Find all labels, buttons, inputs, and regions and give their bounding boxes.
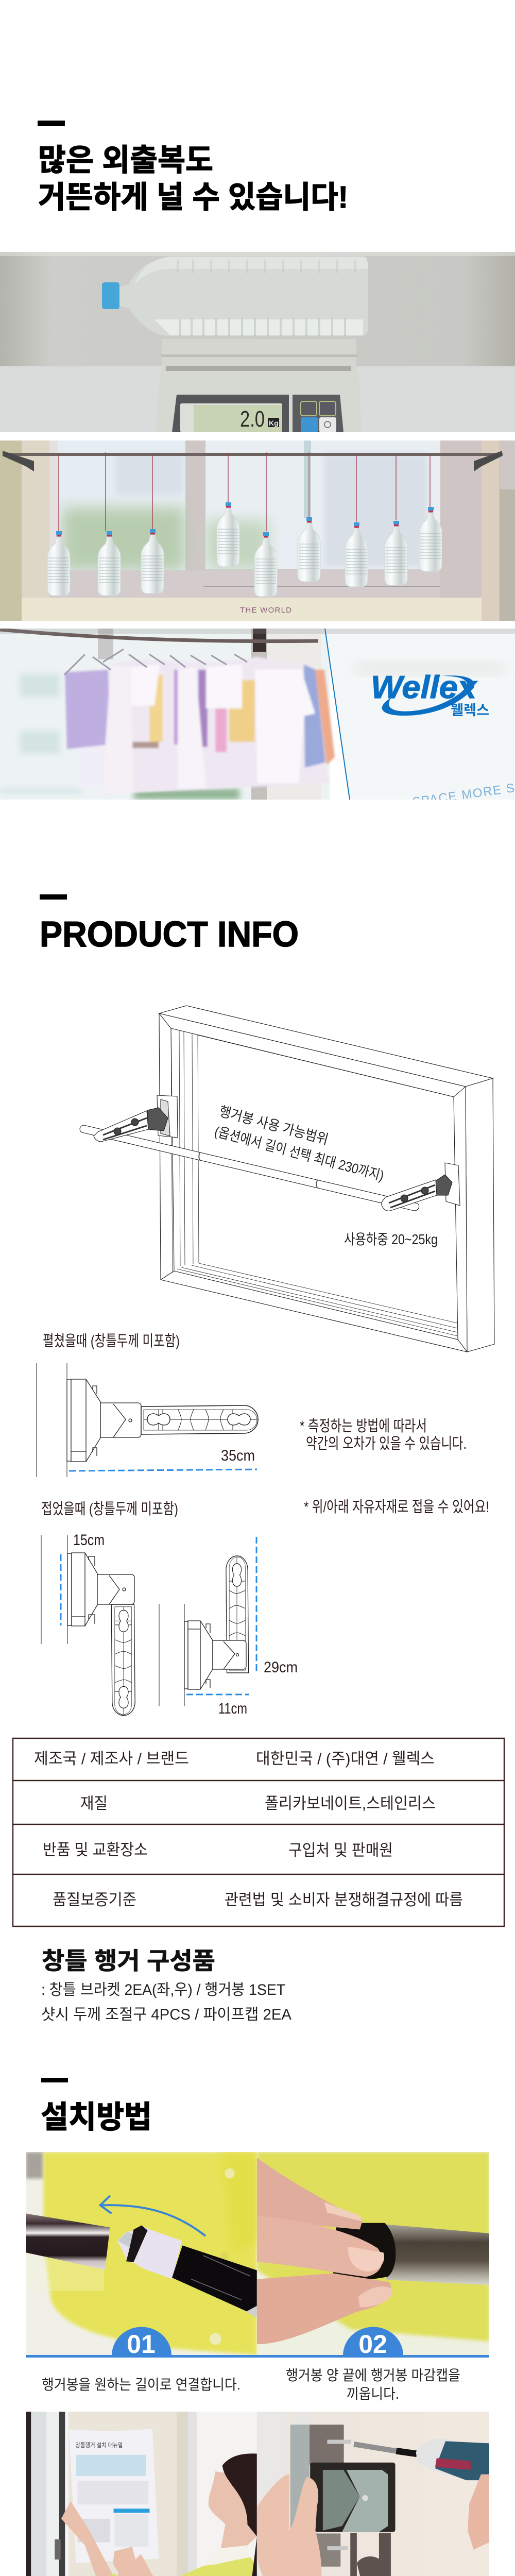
row: returns: 반품 및 교환장소 [43,1841,148,1859]
note line 2: 약간의 오차가 있을 수 있습니다. [306,1435,467,1452]
heading: unfolded size: 펼쳤을때 (창틀두께 미포함) [43,1333,180,1350]
wall lines [37,1363,67,1477]
hanger rod [80,1125,419,1211]
width label: 35cm [221,1447,255,1464]
rod end cap [333,2223,396,2282]
bracket body [67,1379,141,1462]
hanging rod [3,453,503,456]
hangers [64,649,247,675]
step caption 02: 행거봉 양 끝에 행거봉 마감캡을 [286,2367,460,2383]
diagram: unfolded bracket [37,1363,258,1477]
row: origin and brand: 대한민국 / (주)대연 / 웰렉스 [256,1750,435,1768]
height dimension line [255,1537,258,1672]
height label: 29cm [264,1659,298,1676]
heading: folded size: 접었을때 (창틀두께 미포함) [41,1501,178,1518]
row: material [80,1794,436,1812]
heading line 2: 거뜬하게 널 수 있습니다! [38,180,348,214]
bracket plate [290,2425,417,2576]
row: warranty [53,1891,463,1909]
sill and walls [70,570,254,579]
woman: arm and cardigan [61,2501,257,2576]
drill [416,2438,489,2536]
paper title: 창틀행거 설치 매뉴얼 [75,2441,123,2449]
bracket body [184,1621,246,1689]
row: warranty: 품질보증기준 [53,1891,136,1909]
step badge 02: 02 [358,2330,387,2359]
width dimension line [69,1469,257,1471]
logo korean name: 웰렉스 [451,703,489,718]
photo: bottle on scale [0,252,515,432]
window frame [159,1006,494,1352]
folding arm [226,1556,249,1673]
hands [257,2475,489,2576]
guide paper [69,2429,159,2563]
section heading: product info [40,894,299,954]
heading line 1: 많은 외출복도 [38,143,213,177]
bottle strings [59,452,430,531]
step badge 01 [112,2327,171,2359]
step badge 02 [343,2327,403,2359]
section title: 설치방법 [41,2100,152,2134]
note: measurement tolerance [300,1418,467,1452]
scale display panel [172,395,289,432]
depth label: 11cm [218,1700,247,1717]
step badge 01: 01 [127,2330,156,2359]
clothes [65,657,335,794]
components list [41,1947,291,2023]
note line 1: * 측정하는 방법에 따라서 [300,1418,427,1435]
photo: laundry on rod with wellex logo [0,629,515,809]
folding arm [111,1604,135,1716]
logo wordmark: Wellex [371,670,478,705]
step bars [26,2355,489,2576]
bottles [47,502,442,597]
diagram: folded bracket upward [159,1537,298,1717]
components line 2: 샷시 두께 조절구 4PCS / 파이프캡 2EA [41,2006,291,2023]
row: material: 폴리카보네이트,스테인리스 [265,1794,436,1812]
photo 04: tightening screws [257,2412,489,2576]
scale body: Kg [269,419,279,427]
row: warranty: 관련법 및 소비자 분쟁해결규정에 따름 [225,1891,463,1909]
step caption 02: 끼웁니다. [347,2386,399,2402]
diagram: folded bracket downward [41,1532,135,1716]
panel slogan: SPACE MORE S [411,781,515,809]
scale reading: 2.0 [240,406,265,432]
install photos row 1-2 [26,2152,489,2576]
scale body [156,339,362,432]
components line 1: : 창틀 브라켓 2EA(좌,우) / 행거봉 1SET [41,1981,285,1998]
row: origin and brand [34,1750,435,1768]
right promo panel [325,629,515,800]
photo: bottles hanging on rod [0,440,515,621]
window panes [49,440,440,570]
heading: 많은 외출복도 [38,121,348,214]
components heading: 창틀 행거 구성품 [42,1947,215,1974]
label line 1: 행거봉 사용 가능범위 [217,1104,330,1147]
step caption 02 [286,2367,460,2402]
heading accent bar [38,121,65,126]
wall lines [41,1535,67,1644]
wall lines [159,1604,184,1706]
wellex logo [373,674,489,716]
depth dimension line [60,1554,62,1625]
section title: PRODUCT INFO [40,914,299,954]
depth dimension line [186,1694,249,1695]
folding arm [141,1405,258,1434]
water bottle [102,257,368,336]
background building [0,674,239,800]
label line 2: (옵션에서 길이 선택 최대 230까지) [213,1124,386,1184]
table grid [13,1738,504,1926]
woman: head [209,2453,257,2576]
window frame [98,629,321,800]
depth label: 15cm [73,1532,105,1549]
row: material: 재질 [80,1794,108,1812]
photo 02: fitting cap [257,2152,489,2355]
section accent bar [40,894,67,900]
logo swoosh [382,675,474,716]
diagram: window with hanger rod [80,1006,494,1352]
row: returns [43,1841,393,1859]
arrow: turn direction [100,2196,205,2236]
unit badge [268,418,279,427]
panel edge line [325,629,350,800]
label: usable range [213,1104,386,1184]
section accent bar [41,2078,68,2082]
spec table [13,1738,504,1926]
row: returns: 구입처 및 판매원 [288,1841,393,1859]
scale buttons [293,395,344,432]
right bracket [381,1163,460,1211]
bracket body [67,1553,134,1626]
row: origin and brand: 제조국 / 제조사 / 브랜드 [34,1750,189,1768]
wall doodle: THE WORLD [240,606,291,615]
label: load capacity: 사용하중 20~25kg [344,1231,438,1247]
photo 03: positioning guide [26,2412,257,2576]
rod brackets [3,451,34,471]
step caption 01: 행거봉을 원하는 길이로 연결합니다. [42,2377,241,2393]
left bracket [94,1095,178,1142]
photo 01: connecting rod [26,2152,257,2355]
section heading: installation [41,2078,152,2134]
clothes rod [0,630,318,641]
